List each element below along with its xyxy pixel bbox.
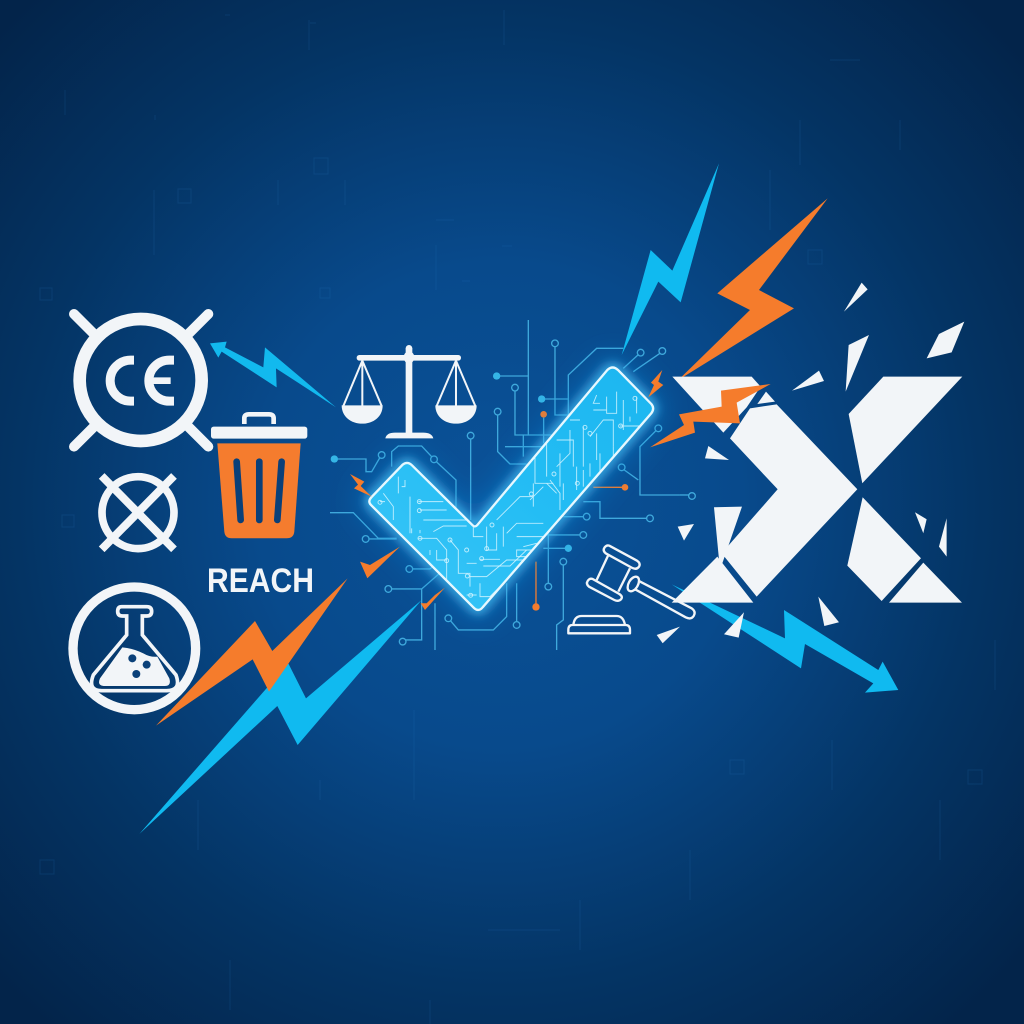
arrow: small blue lightning toward CE mark (210, 342, 336, 407)
icon: scales of justice (342, 345, 477, 438)
arrow: orange lightning across the X (650, 384, 771, 447)
icon: crossed circle (102, 476, 174, 549)
chart: circuit traces around the check mark (330, 320, 695, 650)
arrow: orange lightning top (678, 198, 828, 380)
arrow: large blue lightning bottom left (139, 600, 422, 834)
icon: chemical flask in circle (73, 587, 196, 710)
icon: CE mark in crossed circle (74, 314, 208, 447)
icon: trash bin (211, 414, 307, 538)
arrow: blue lightning arrow bottom right (672, 584, 898, 693)
label: REACH: REACH (207, 562, 314, 600)
icon: shattered white X (657, 283, 964, 643)
icon: small orange sparks around the check (350, 370, 663, 610)
icon: judge gavel (568, 545, 695, 633)
icon: glowing circuit check mark (369, 367, 653, 610)
arrow: large orange lightning bottom left (156, 578, 348, 726)
arrow: blue lightning top (622, 163, 719, 355)
